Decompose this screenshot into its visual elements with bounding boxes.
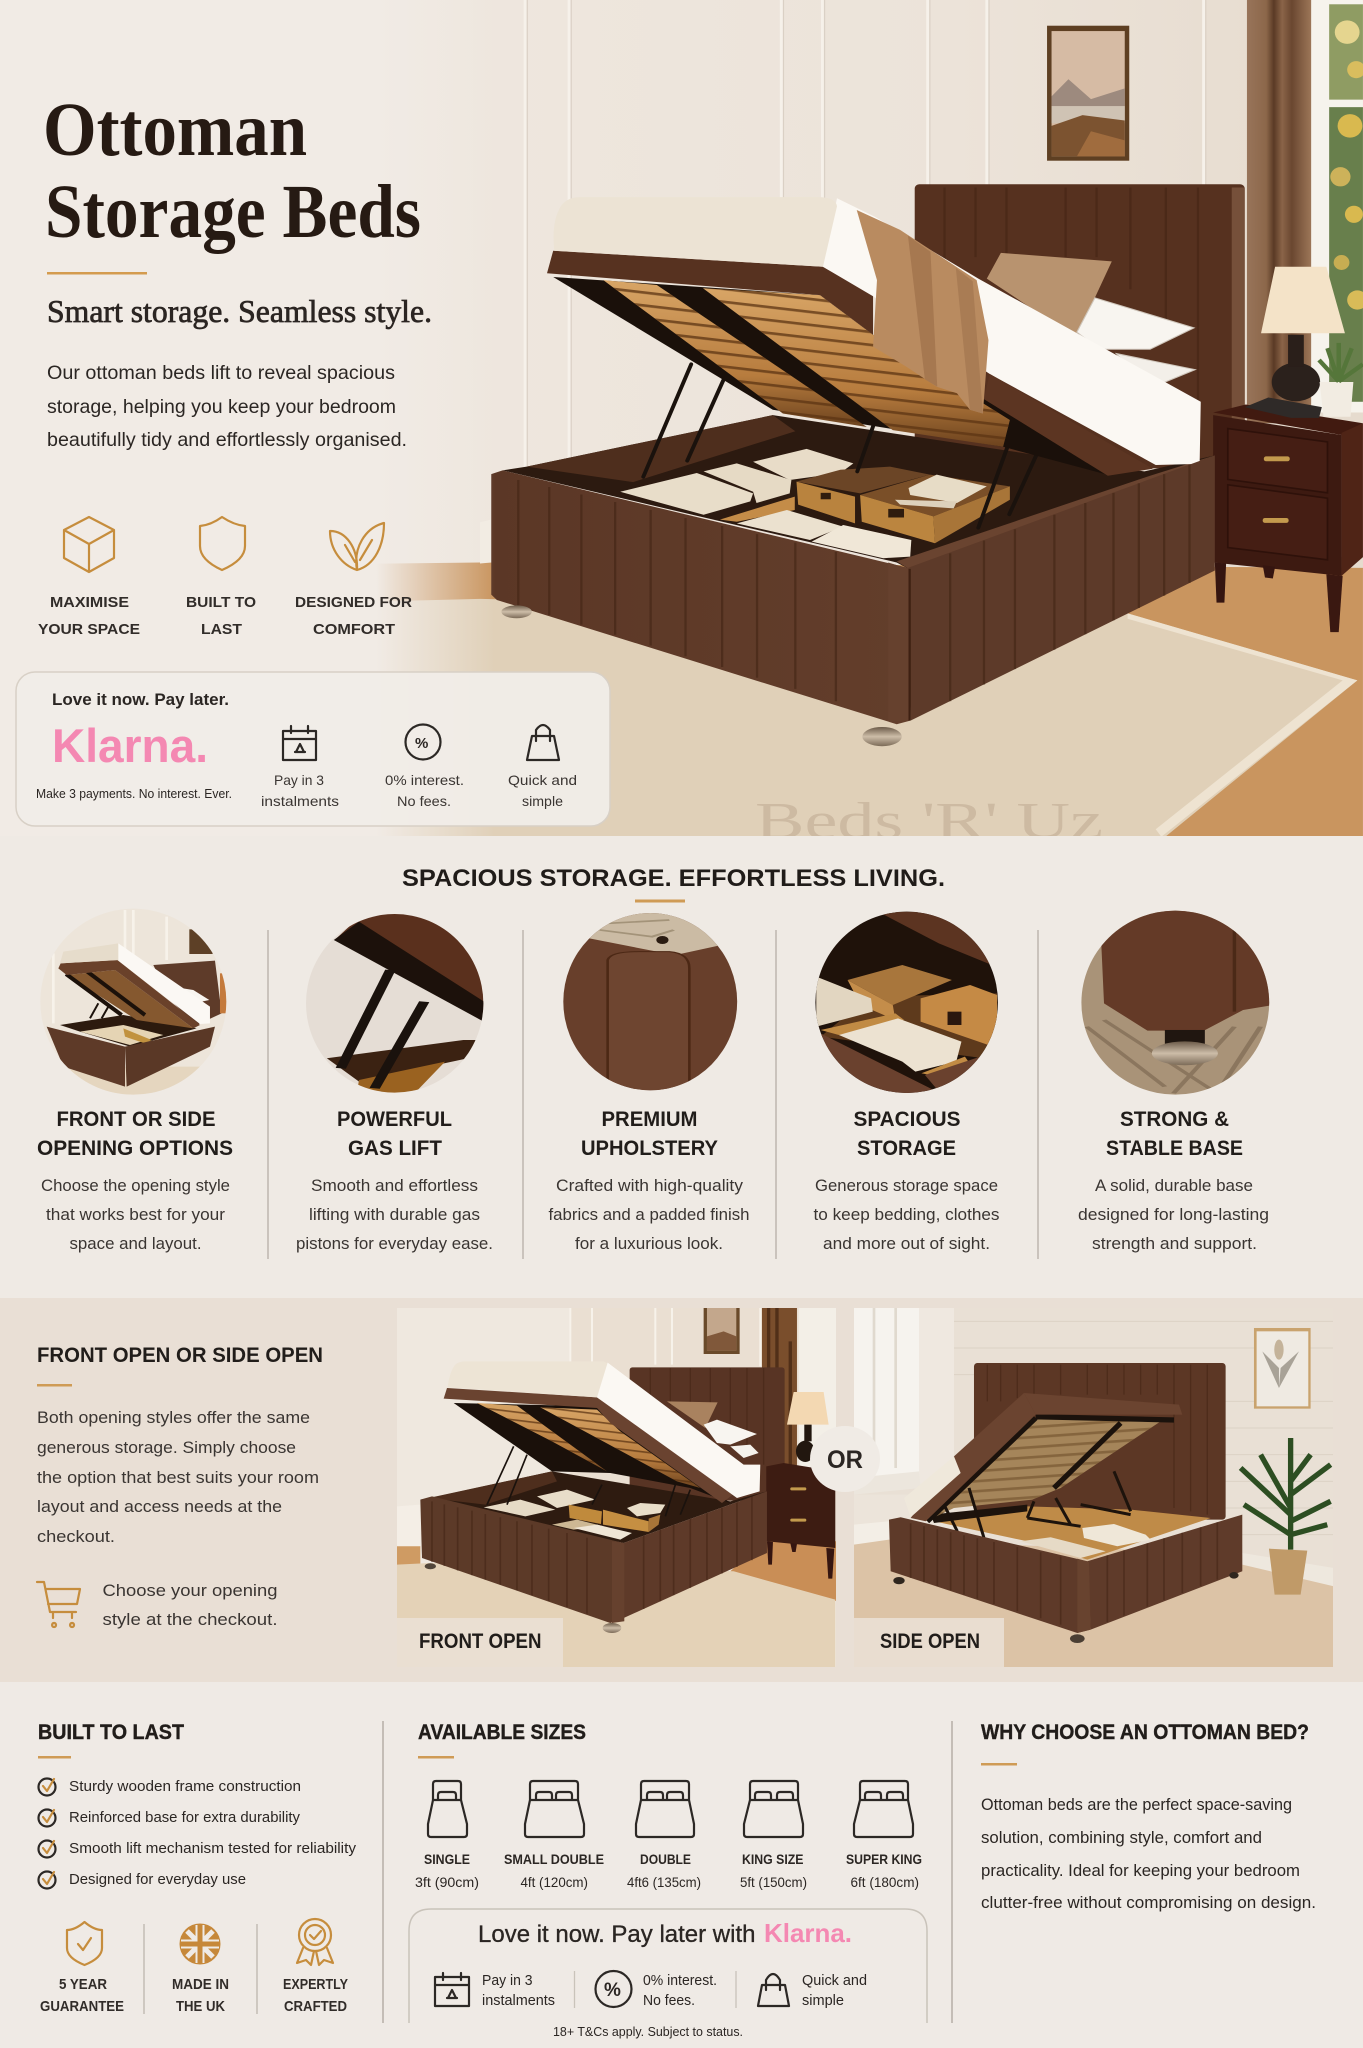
label: front open: FRONT OPEN: [419, 1630, 542, 1653]
description: Both opening styles offer the same: [37, 1408, 310, 1427]
size: double: 4ft6 (135cm): [627, 1874, 701, 1890]
item: quick and simple: simple: [522, 793, 563, 809]
column: storage: [814, 1108, 1000, 1253]
description: checkout.: [37, 1527, 115, 1546]
window: [1311, 0, 1363, 412]
vertical dividers: [383, 1721, 952, 2023]
panel: hero photo of ottoman bed: [384, 0, 1363, 836]
checkout note: style at the checkout.: [102, 1610, 278, 1629]
heading accent: [37, 1384, 72, 1386]
left fade overlay: [0, 562, 488, 836]
title: Storage Beds: [45, 170, 421, 254]
section heading: FRONT OPEN OR SIDE OPEN: [37, 1344, 323, 1367]
column: storage: to keep bedding, clothes: [814, 1205, 1000, 1224]
feature: designed for comfort: COMFORT: [313, 621, 395, 638]
column: front or side: Choose the opening style: [41, 1176, 230, 1195]
circle photo: whole bed: [37, 907, 230, 1100]
column: upholstery: Crafted with high-quality: [556, 1176, 744, 1195]
circle photo: bed foot: [1078, 908, 1274, 1097]
circle photo: gas lift: [300, 912, 491, 1095]
item: pay in 3: [435, 1973, 555, 2009]
size: single: 3ft (90cm): [415, 1874, 479, 1890]
column: storage: SPACIOUS: [854, 1108, 960, 1131]
card heading: Love it now. Pay later.: [52, 690, 229, 709]
badge: 5 year guarantee: GUARANTEE: [40, 1998, 124, 2015]
column: storage: STORAGE: [857, 1137, 956, 1160]
badge: made in the uk: THE UK: [176, 1998, 225, 2015]
item: zero interest: %: [604, 1980, 621, 2001]
block: available sizes: [415, 1721, 922, 1890]
size: small double: SMALL DOUBLE: [504, 1851, 604, 1867]
size: king: 5ft (150cm): [740, 1874, 807, 1890]
label: front open: [397, 1618, 563, 1667]
explanation text: [981, 1796, 1316, 1912]
size: king: KING SIZE: [742, 1851, 804, 1867]
column: upholstery: fabrics and a padded finish: [548, 1205, 750, 1224]
intro text: [47, 362, 407, 451]
item: zero interest: [385, 724, 464, 809]
table lamp and plant: [1245, 267, 1363, 418]
throw blanket: [857, 210, 988, 414]
size: super king: [846, 1781, 922, 1890]
check list: Designed for everyday use: [69, 1871, 246, 1888]
block: why choose an ottoman bed: WHY CHOOSE AN OTTOMAN BED?: [981, 1721, 1309, 1744]
column: base: strength and support.: [1092, 1234, 1257, 1253]
item: zero interest: [596, 1971, 717, 2009]
block: built to last: BUILT TO LAST: [38, 1721, 184, 1744]
column: front or side: space and layout.: [70, 1234, 202, 1253]
pillows: [987, 253, 1195, 384]
explanation text: solution, combining style, comfort and: [981, 1829, 1262, 1847]
photo: side open bed: [854, 1308, 1334, 1668]
check list: Smooth lift mechanism tested for reliability: [69, 1840, 356, 1857]
badge: or: OR: [827, 1446, 863, 1474]
column: upholstery: [548, 1108, 750, 1253]
item: zero interest: 0% interest.: [385, 772, 464, 788]
column: upholstery: UPHOLSTERY: [581, 1137, 718, 1160]
subtitle: Smart storage. Seamless style.: [47, 293, 432, 329]
badge dividers: [144, 1924, 257, 2014]
column: base: [1078, 1108, 1269, 1253]
explanation text: Ottoman beds are the perfect space-saving: [981, 1796, 1292, 1814]
description: layout and access needs at the: [37, 1497, 282, 1516]
terms note: 18+ T&Cs apply. Subject to status.: [553, 2025, 743, 2039]
badge: 5 year guarantee: [40, 1922, 124, 2015]
description: [37, 1408, 319, 1546]
label: side open: [854, 1618, 1004, 1667]
title: [43, 88, 421, 254]
item: pay in 3: Pay in 3: [274, 772, 324, 788]
item: quick and simple: Quick and: [802, 1973, 867, 1989]
heading accent: [635, 900, 685, 902]
item: quick and simple: Quick and: [508, 772, 577, 788]
feature: built to last: LAST: [201, 621, 242, 638]
stored bedding and baskets: [620, 449, 1010, 558]
badge: expertly crafted: CRAFTED: [284, 1998, 347, 2015]
feature: built to last: [186, 517, 256, 638]
box heading: Love it now. Pay later with: [478, 1921, 756, 1948]
column: gas lift: GAS LIFT: [348, 1137, 442, 1160]
title accent line: [47, 272, 147, 274]
badge: made in the uk: MADE IN: [172, 1976, 229, 1993]
check list: [38, 1778, 356, 1888]
bed base interior and rim: [503, 415, 1215, 570]
explanation text: practicality. Ideal for keeping your bedroom: [981, 1862, 1300, 1880]
size: small double: 4ft (120cm): [520, 1874, 588, 1890]
feature: maximise your space: [38, 517, 140, 638]
column: upholstery: for a luxurious look.: [575, 1234, 723, 1253]
size: double: [627, 1781, 701, 1890]
size: king: [740, 1781, 807, 1890]
item: quick and simple: [508, 725, 577, 809]
intro text: Our ottoman beds lift to reveal spacious: [47, 362, 395, 384]
description: generous storage. Simply choose: [37, 1438, 296, 1457]
size: double: DOUBLE: [640, 1851, 691, 1867]
mattress: [554, 197, 1201, 476]
badge: made in the uk: [172, 1924, 229, 2015]
column: front or side: FRONT OR SIDE: [56, 1108, 216, 1131]
item: zero interest: No fees.: [397, 793, 451, 809]
description: the option that best suits your room: [37, 1468, 319, 1487]
panel: bottom information section: [0, 1682, 1363, 2048]
item: zero interest: %: [415, 735, 428, 752]
column: front or side: OPENING OPTIONS: [37, 1137, 233, 1160]
size: single: [415, 1781, 479, 1890]
column: base: designed for long-lasting: [1078, 1205, 1269, 1224]
klarna wordmark: Klarna.: [764, 1918, 852, 1948]
column: front or side: [37, 1108, 233, 1253]
item: pay in 3: [261, 726, 339, 809]
feature: designed for comfort: DESIGNED FOR: [295, 594, 412, 611]
bed base front faces: [491, 455, 1215, 724]
item: pay in 3: instalments: [261, 793, 339, 809]
panel: front open or side open section: [0, 1298, 1363, 1682]
explanation text: clutter-free without compromising on design.: [981, 1894, 1316, 1912]
column dividers: [268, 930, 1038, 1259]
size: small double: [504, 1781, 604, 1890]
intro text: storage, helping you keep your bedroom: [47, 396, 396, 418]
section heading: SPACIOUS STORAGE. EFFORTLESS LIVING.: [402, 865, 945, 892]
klarna tagline: Make 3 payments. No interest. Ever.: [36, 787, 232, 801]
photo: front open bed: [397, 1308, 837, 1668]
column: base: STABLE BASE: [1106, 1137, 1243, 1160]
badge: or: [810, 1426, 880, 1492]
bed feet: [501, 605, 902, 746]
column: gas lift: pistons for everyday ease.: [296, 1234, 493, 1253]
size: super king: SUPER KING: [846, 1851, 922, 1867]
checkout note: Choose your opening: [102, 1581, 278, 1600]
item: pay in 3: Pay in 3: [482, 1973, 532, 1989]
column: gas lift: Smooth and effortless: [311, 1176, 478, 1195]
circle photo: storage interior: [808, 910, 1004, 1097]
curtain: [1247, 0, 1311, 423]
feature: maximise your space: YOUR SPACE: [38, 621, 140, 638]
item: zero interest: 0% interest.: [643, 1973, 717, 1989]
size: super king: 6ft (180cm): [850, 1874, 919, 1890]
badge: expertly crafted: [283, 1919, 348, 2015]
item: quick and simple: [758, 1973, 867, 2009]
title: Ottoman: [43, 88, 307, 172]
block: why choose an ottoman bed: [981, 1721, 1316, 1912]
item: pay in 3: instalments: [482, 1993, 555, 2009]
icon: cart: [37, 1582, 80, 1627]
nightstand: [1213, 404, 1363, 632]
feature: designed for comfort: [295, 523, 412, 638]
circle photo: upholstery corner: [563, 913, 738, 1090]
panel: klarna pay later box: [409, 1909, 927, 2023]
column: storage: Generous storage space: [815, 1176, 998, 1195]
column: gas lift: POWERFUL: [337, 1108, 452, 1131]
framed picture: [1047, 26, 1129, 161]
column: base: STRONG &: [1120, 1108, 1229, 1131]
item divider: [574, 1971, 736, 2008]
column: front or side: that works best for your: [46, 1205, 225, 1224]
panel: klarna card: [16, 672, 610, 826]
badge: 5 year guarantee: 5 YEAR: [59, 1976, 107, 1993]
column: storage: and more out of sight.: [823, 1234, 990, 1253]
gas lift pistons: [643, 364, 1037, 528]
watermark: Beds 'R' Uz: [755, 793, 1103, 850]
lifted lid with slats: [547, 251, 1105, 474]
intro text: beautifully tidy and effortlessly organised.: [47, 429, 407, 451]
headboard: [915, 184, 1245, 468]
checkout note: [102, 1581, 278, 1629]
block: built to last: [38, 1721, 356, 2015]
column: base: A solid, durable base: [1095, 1176, 1253, 1195]
klarna logo: Klarna.: [52, 719, 208, 772]
column: gas lift: [296, 1108, 493, 1253]
label: side open: SIDE OPEN: [880, 1630, 980, 1653]
check list: Reinforced base for extra durability: [69, 1809, 300, 1826]
item: quick and simple: simple: [802, 1993, 844, 2009]
check list: Sturdy wooden frame construction: [69, 1778, 301, 1795]
feature: built to last: BUILT TO: [186, 594, 256, 611]
item: zero interest: No fees.: [643, 1993, 695, 2009]
column: upholstery: PREMIUM: [602, 1108, 698, 1131]
feature: maximise your space: MAXIMISE: [50, 594, 129, 611]
panel: features section: [38, 869, 1270, 1259]
block: available sizes: AVAILABLE SIZES: [418, 1721, 586, 1744]
size: single: SINGLE: [424, 1851, 470, 1867]
column: gas lift: lifting with durable gas: [309, 1205, 480, 1224]
badge: expertly crafted: EXPERTLY: [283, 1976, 348, 1993]
